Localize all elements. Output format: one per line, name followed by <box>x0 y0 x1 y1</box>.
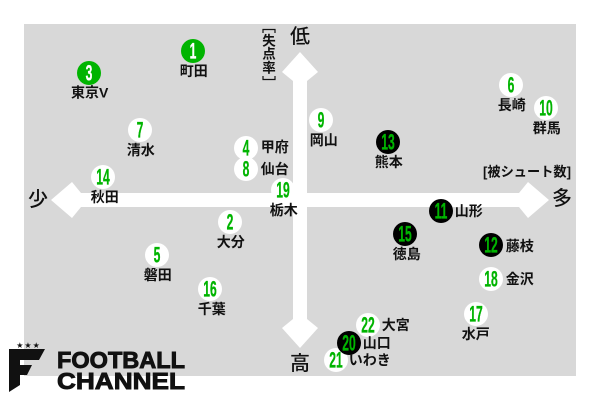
team 2 Oita <box>217 210 245 250</box>
team 15 Tokushima: 15 <box>398 222 412 246</box>
team 11 Yamagata <box>429 199 483 223</box>
team 4 Kofu <box>234 136 289 160</box>
team 22 Omiya: 大宮 <box>382 317 410 333</box>
team 13 Kumamoto <box>375 130 403 170</box>
team 16 Chiba <box>198 277 226 317</box>
team 8 Sendai: 8 <box>243 157 249 181</box>
team 14 Akita: 秋田 <box>91 189 119 205</box>
team 20 Yamaguchi: 山口 <box>363 335 391 351</box>
team 15 Tokushima: 徳島 <box>393 246 421 262</box>
team 3 Tokyo V: 東京V <box>71 84 109 100</box>
team 19 Tochigi: 栃木 <box>270 202 298 218</box>
team 2 Oita: 大分 <box>217 234 245 250</box>
team 10 Gunma: 10 <box>539 96 553 120</box>
team 22 Omiya: 22 <box>361 313 375 337</box>
team 3 Tokyo V <box>71 61 109 100</box>
arrow: horizontal axis <box>51 182 549 218</box>
team 9 Okayama <box>309 108 338 148</box>
team 13 Kumamoto: 13 <box>381 130 395 154</box>
axis title: goals conceded <box>262 30 276 80</box>
team 1 Machida <box>180 39 208 79</box>
logo stars: ★★★ <box>16 341 41 350</box>
team 6 Nagasaki: 6 <box>508 73 514 97</box>
team 5 Iwata: 磐田 <box>144 267 172 283</box>
team 18 Kanazawa <box>479 267 534 291</box>
team 11 Yamagata: 山形 <box>455 203 483 219</box>
team 17 Mito: 水戸 <box>462 326 490 342</box>
team 14 Akita <box>91 165 119 205</box>
team 10 Gunma <box>533 96 561 136</box>
team 11 Yamagata: 11 <box>435 199 447 223</box>
axis title: shots faced: [被シュート数] <box>483 164 571 180</box>
logo wordmark line 2: CHANNEL <box>57 368 185 394</box>
team 9 Okayama: 9 <box>318 108 324 132</box>
team 18 Kanazawa: 18 <box>484 267 498 291</box>
team 16 Chiba: 千葉 <box>198 301 226 317</box>
axis label: many: 多 <box>552 187 572 210</box>
team 1 Machida: 町田 <box>180 63 208 79</box>
team 17 Mito: 17 <box>469 302 483 326</box>
team 4 Kofu: 4 <box>243 136 249 160</box>
team 12 Fujieda <box>479 233 534 257</box>
team 7 Shimizu <box>127 118 155 158</box>
axis label: high: 高 <box>290 352 310 375</box>
team 12 Fujieda: 藤枝 <box>506 238 534 254</box>
team 2 Oita: 2 <box>227 210 233 234</box>
team 7 Shimizu: 7 <box>137 118 143 142</box>
team 8 Sendai <box>234 157 289 181</box>
team 21 Iwaki: いわき <box>349 352 391 368</box>
arrow: vertical axis <box>282 52 318 348</box>
axis label: low: 低 <box>290 25 310 48</box>
team 18 Kanazawa: 金沢 <box>506 271 534 287</box>
logo mark <box>9 349 45 392</box>
team 22 Omiya <box>356 313 410 337</box>
team 1 Machida: 1 <box>190 39 196 63</box>
team 21 Iwaki: 21 <box>329 348 343 372</box>
team 14 Akita: 14 <box>96 165 110 189</box>
logo wordmark line 1: FOOTBALL <box>57 347 185 373</box>
team 10 Gunma: 群馬 <box>533 120 561 136</box>
team 12 Fujieda: 12 <box>484 233 498 257</box>
axis label: few: 少 <box>28 188 48 211</box>
team 5 Iwata: 5 <box>154 243 160 267</box>
axis title: goals conceded: 率 <box>262 60 276 76</box>
team 7 Shimizu: 清水 <box>127 142 155 158</box>
team 21 Iwaki <box>324 348 391 372</box>
team 9 Okayama: 岡山 <box>310 132 338 148</box>
axis title: goals conceded: 失 <box>262 32 276 48</box>
team 19 Tochigi <box>270 178 298 218</box>
team 20 Yamaguchi: 20 <box>342 331 356 355</box>
axis title: goals conceded: 点 <box>262 46 276 62</box>
team 6 Nagasaki <box>498 73 526 113</box>
team 8 Sendai: 仙台 <box>261 161 289 177</box>
team 20 Yamaguchi <box>337 331 391 355</box>
team 5 Iwata <box>144 243 172 283</box>
team 3 Tokyo V: 3 <box>86 61 92 85</box>
team 17 Mito <box>462 302 490 342</box>
team 16 Chiba: 16 <box>203 277 217 301</box>
team 13 Kumamoto: 熊本 <box>375 154 403 170</box>
team 4 Kofu: 甲府 <box>261 139 289 155</box>
team 15 Tokushima <box>393 222 421 262</box>
team 19 Tochigi: 19 <box>276 178 290 202</box>
logo: Football Channel <box>9 341 185 394</box>
team 6 Nagasaki: 長崎 <box>498 97 526 113</box>
